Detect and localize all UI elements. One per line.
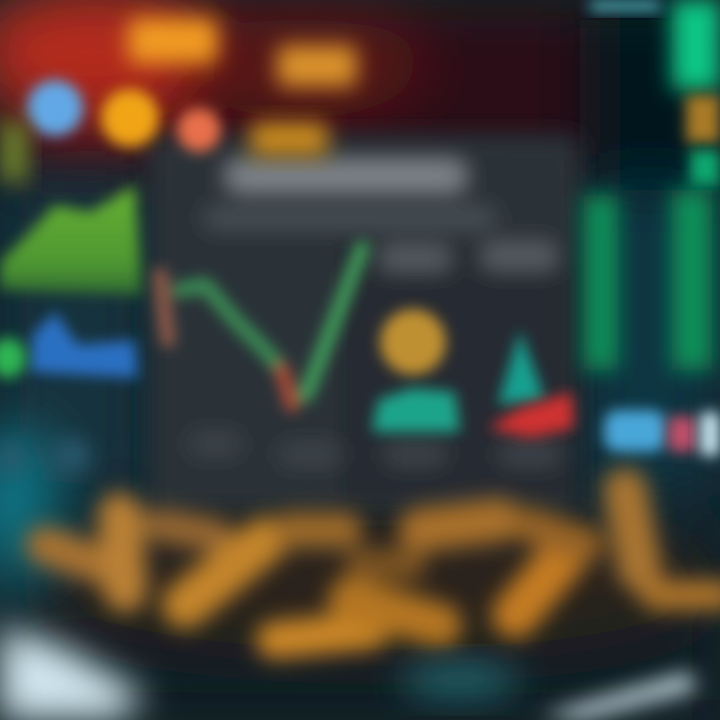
shapes: faint lower left marks bbox=[0, 439, 90, 474]
label: orange block one bbox=[128, 18, 218, 64]
chart: blue area bbox=[30, 312, 138, 378]
label: orange block two bbox=[277, 45, 357, 87]
icon: yellow circle bbox=[101, 89, 159, 147]
shape: teal coin base bbox=[372, 388, 460, 432]
chart: line chart bbox=[160, 248, 362, 405]
chart: green area bbox=[0, 185, 142, 295]
text block: blurred column labels bbox=[380, 243, 557, 270]
shape: bottom left white highlight bbox=[0, 625, 145, 720]
shape: right green block bbox=[690, 150, 720, 186]
shape: bottom right white streak bbox=[540, 672, 696, 720]
text block: blurred footer labels bbox=[190, 433, 560, 465]
shape: bottom teal glow bbox=[400, 662, 520, 698]
chart: right green bars bbox=[584, 190, 712, 370]
shape: right orange block bbox=[686, 95, 720, 143]
shape: right red pill bbox=[668, 416, 696, 452]
icon: gold coin bbox=[380, 309, 446, 375]
shape: top cyan streak bbox=[590, 0, 660, 12]
shape: red wedge bbox=[488, 392, 574, 438]
panel: central dashboard bbox=[150, 135, 580, 510]
shape: right blue pill bbox=[604, 410, 666, 452]
heading: blurred title bbox=[228, 162, 464, 190]
shape: green dot at left bbox=[0, 338, 26, 378]
shape: right white pill bbox=[700, 412, 720, 456]
shape: olive block at left bbox=[0, 122, 28, 182]
shape: teal triangle bbox=[498, 330, 545, 405]
text block: blurred subtitle bbox=[205, 208, 495, 228]
label: orange block three bbox=[250, 122, 328, 156]
illustration: golden chain of links bbox=[45, 490, 720, 640]
icon: salmon circle bbox=[177, 108, 221, 152]
shape: top right green bbox=[672, 0, 720, 90]
icon: blue circle bbox=[27, 80, 83, 136]
